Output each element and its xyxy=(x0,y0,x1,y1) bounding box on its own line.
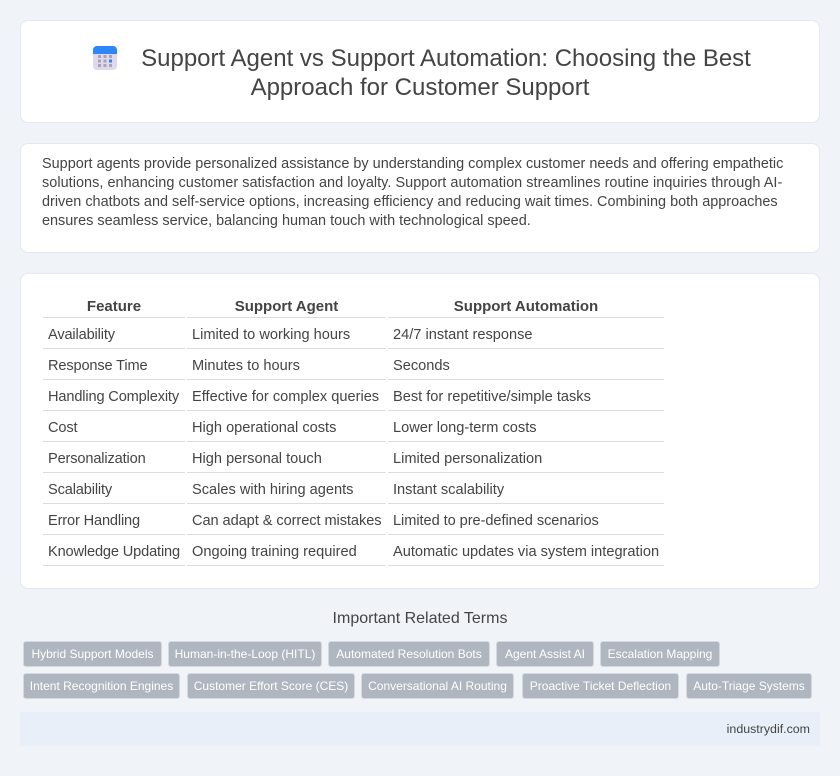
title: Approach for Customer Support xyxy=(251,74,589,101)
row: handling complexity xyxy=(48,389,591,405)
row: knowledge updating: Knowledge Updating xyxy=(48,544,180,560)
row: response time xyxy=(48,358,450,374)
tags: related terms xyxy=(23,641,812,699)
row: knowledge updating: Automatic updates via system integration xyxy=(393,544,659,560)
text block: introduction: ensures seamless service, balancing human touch with technological speed. xyxy=(42,213,531,229)
row: availability: Limited to working hours xyxy=(192,327,350,343)
row: knowledge updating xyxy=(48,544,659,560)
tags: related terms: Auto-Triage Systems xyxy=(693,679,805,693)
comparison table xyxy=(43,298,664,566)
tags: related terms: Customer Effort Score (CES) xyxy=(194,679,348,693)
text block: introduction: driven chatbots and self-service options, increasing efficiency and reducing wait times. Combining both approaches xyxy=(42,194,778,210)
footer xyxy=(20,712,820,746)
text block: introduction: solutions, enhancing customer satisfaction and loyalty. Support automation streamlines routine inquiries through AI- xyxy=(42,175,782,191)
heading: related terms: Important Related Terms xyxy=(333,610,507,627)
row: availability: Availability xyxy=(48,327,115,343)
table header: Support Agent xyxy=(235,298,338,315)
row: response time: Seconds xyxy=(393,358,450,374)
row: handling complexity: Best for repetitive/simple tasks xyxy=(393,389,591,405)
panel: title header xyxy=(20,20,820,123)
table header xyxy=(87,298,598,315)
row: scalability xyxy=(48,482,504,498)
tags: related terms: Proactive Ticket Deflection xyxy=(530,679,671,693)
title xyxy=(141,45,751,101)
text block: introduction xyxy=(42,156,783,229)
table header: Support Automation xyxy=(454,298,598,315)
row: error handling: Can adapt & correct mistakes xyxy=(192,513,381,529)
tags: related terms: Hybrid Support Models xyxy=(31,647,154,661)
row: personalization xyxy=(48,451,542,467)
table header: Feature xyxy=(87,298,141,315)
row: cost: Lower long-term costs xyxy=(393,420,537,436)
text block: introduction: Support agents provide personalized assistance by understanding complex customer needs and offering empathetic xyxy=(42,156,783,172)
tags: related terms: Human-in-the-Loop (HITL) xyxy=(175,647,315,661)
row: scalability: Instant scalability xyxy=(393,482,504,498)
tags: related terms: Agent Assist AI xyxy=(505,647,585,661)
row: scalability: Scalability xyxy=(48,482,112,498)
row: handling complexity: Handling Complexity xyxy=(48,389,179,405)
row: scalability: Scales with hiring agents xyxy=(192,482,353,498)
row: personalization: High personal touch xyxy=(192,451,322,467)
row: cost: Cost xyxy=(48,420,77,436)
row: cost xyxy=(48,420,537,436)
row: personalization: Limited personalization xyxy=(393,451,542,467)
footer source text: industrydif.com xyxy=(727,722,810,736)
row: knowledge updating: Ongoing training required xyxy=(192,544,357,560)
tags: related terms: Conversational AI Routing xyxy=(368,679,507,693)
title: Support Agent vs Support Automation: Choosing the Best xyxy=(141,45,751,72)
panel: comparison table xyxy=(20,273,820,589)
row: response time: Minutes to hours xyxy=(192,358,300,374)
row: response time: Response Time xyxy=(48,358,147,374)
row: error handling xyxy=(48,513,599,529)
row: error handling: Error Handling xyxy=(48,513,140,529)
panel: introduction xyxy=(20,143,820,253)
row: personalization: Personalization xyxy=(48,451,146,467)
tags: related terms: Escalation Mapping xyxy=(608,647,712,661)
icon: calendar xyxy=(93,46,117,70)
tags: related terms: Automated Resolution Bots xyxy=(336,647,482,661)
row: availability xyxy=(48,327,533,343)
tags: related terms: Intent Recognition Engines xyxy=(30,679,173,693)
row: cost: High operational costs xyxy=(192,420,336,436)
row: availability: 24/7 instant response xyxy=(393,327,533,343)
row: error handling: Limited to pre-defined scenarios xyxy=(393,513,599,529)
row: handling complexity: Effective for complex queries xyxy=(192,389,379,405)
